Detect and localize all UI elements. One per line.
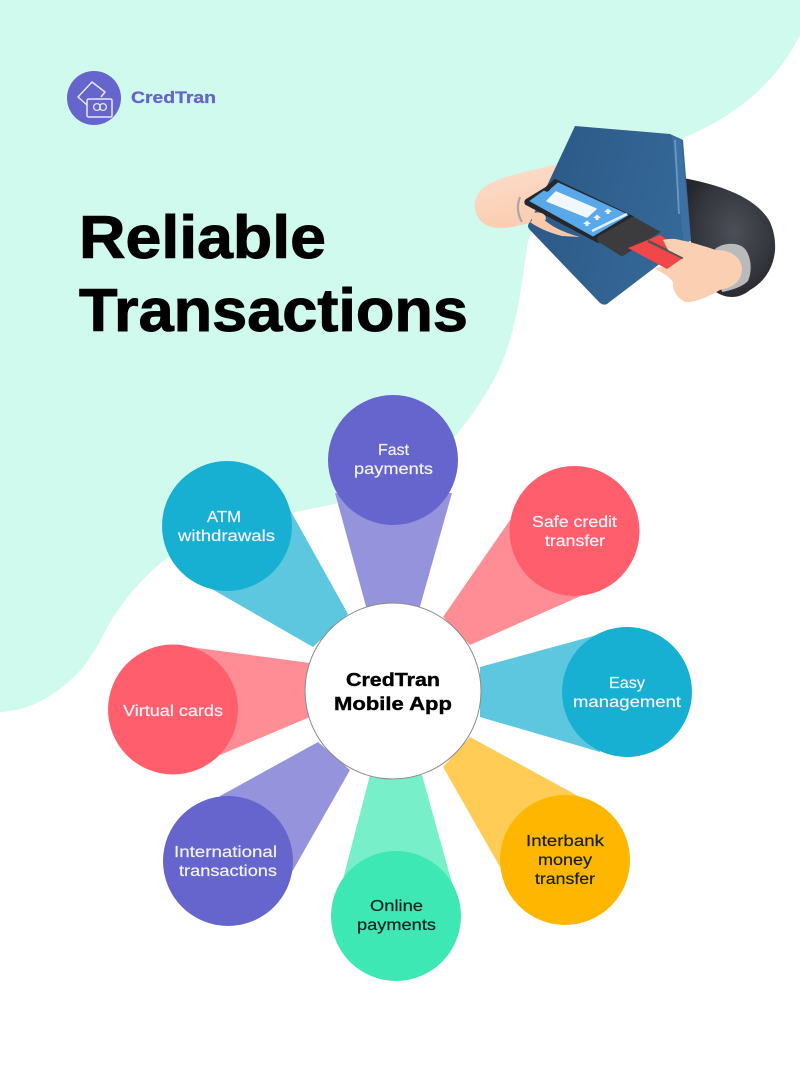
icon: cards [67,71,121,125]
title: Reliable [79,204,326,271]
phone screen [530,183,628,236]
feature: Interbank money transfer: transfer [535,871,596,888]
background mint blob [0,0,800,712]
phone bar [592,214,627,231]
feature: Online payments: payments [357,917,436,934]
red card [628,235,683,269]
dark sleeve [683,178,775,297]
feature: Interbank money transfer [443,737,630,925]
book edge highlight [675,140,679,214]
feature: ATM withdrawals [162,461,348,647]
feature: Interbank money transfer: money [538,852,592,869]
diagram: app features [108,395,692,981]
feature: ATM withdrawals: ATM [207,509,241,526]
feature: Easy management: management [573,694,682,711]
left arm [475,164,556,228]
logo [67,71,216,125]
feature: Easy management: Easy [609,675,645,692]
title [79,204,468,344]
feature: Fast payments: payments [354,461,433,478]
feature: Fast payments: Fast [378,442,410,459]
phone display card [547,192,596,217]
feature: Virtual cards: Virtual cards [123,703,223,720]
feature: Online payments: Online [370,898,423,915]
right cuff [715,244,751,292]
phone [525,180,633,242]
feature: Virtual cards [108,644,310,774]
center hub [305,603,481,779]
card stripe [648,241,683,258]
phone arrows [583,208,612,226]
left finger [531,212,546,223]
feature: Interbank money transfer: Interbank [526,833,605,850]
feature: International transactions [163,742,350,926]
book [528,126,691,305]
book edge [672,136,691,245]
feature: Fast payments [328,395,458,610]
center hub: Mobile App [334,693,452,714]
palm under phone [530,216,580,237]
brand name: CredTran [131,88,216,107]
center hub: CredTran [346,669,440,690]
feature: ATM withdrawals: withdrawals [177,528,275,545]
thumb [663,239,690,258]
right hand [655,239,742,302]
feature: International transactions: transactions [179,863,277,880]
feature: Safe credit transfer: transfer [545,533,606,550]
feature: Easy management [480,627,692,757]
illustration: hands paying with phone and card reader [475,126,775,305]
feature: International transactions: International [174,844,277,861]
feature: Safe credit transfer: Safe credit [532,514,618,531]
reader [598,217,660,256]
title: Transactions [79,277,468,344]
feature: Online payments [331,775,461,981]
feature: Safe credit transfer [443,466,640,645]
wristband [518,197,522,222]
